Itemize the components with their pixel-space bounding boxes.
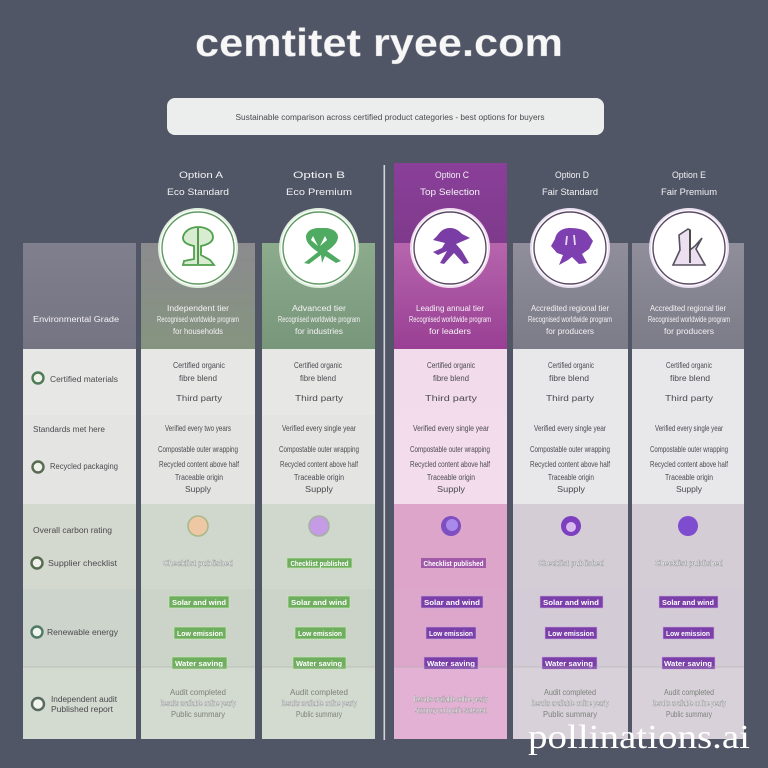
tags: Solar and wind <box>291 600 347 607</box>
row: standards: Compostable outer wrapping <box>530 445 610 454</box>
row: standards: Traceable origin <box>175 473 223 482</box>
panel: column 1 <box>141 170 255 739</box>
tags: Low emission <box>666 631 710 638</box>
rating dot <box>561 516 581 536</box>
row label: notes <box>32 695 118 714</box>
row: notes <box>531 688 609 719</box>
row label: standards <box>32 425 118 472</box>
description: Accredited regional tier <box>650 304 726 313</box>
row label: rating: Supplier checklist <box>48 559 118 568</box>
row: standards: Verified every single year <box>413 424 489 433</box>
row: standards: Supply <box>305 485 333 494</box>
row: notes: Summary and public statement <box>415 706 487 715</box>
heading <box>286 170 352 198</box>
row: notes: Results available online yearly <box>160 699 236 708</box>
description <box>157 304 239 336</box>
watermark: pollinations.ai <box>528 719 750 756</box>
row: standards: Compostable outer wrapping <box>158 445 238 454</box>
panel: column 4 <box>513 170 628 739</box>
description: Independent tier <box>167 304 229 313</box>
tags: Water saving <box>545 661 593 668</box>
description: Recognised worldwide program <box>648 315 730 324</box>
row: standards: Recycled content above half <box>410 460 491 469</box>
description: for producers <box>664 327 714 336</box>
tags: Low emission <box>177 631 223 638</box>
row: standards: Traceable origin <box>427 473 475 482</box>
label column header <box>23 243 136 349</box>
row: certification <box>425 361 477 403</box>
tags <box>659 596 718 669</box>
row: checklist: Checklist published <box>655 559 723 568</box>
heading <box>542 170 598 198</box>
tags <box>288 596 350 669</box>
divider line <box>384 165 385 740</box>
row: standards: Recycled content above half <box>650 460 729 469</box>
row: certification: Third party <box>665 394 713 403</box>
row: certification: Certified organic <box>294 361 342 370</box>
row: standards: Traceable origin <box>665 473 713 482</box>
row: notes <box>414 695 488 715</box>
row: standards: Compostable outer wrapping <box>279 445 359 454</box>
description: Recognised worldwide program <box>278 315 360 324</box>
row: notes: Public summary <box>543 710 597 719</box>
row: standards: Recycled content above half <box>280 460 359 469</box>
row: certification: fibre blend <box>549 374 589 383</box>
row: checklist: Checklist published <box>163 559 233 568</box>
tags: Low emission <box>298 631 342 638</box>
row: standards <box>410 424 491 494</box>
heading: Fair Premium <box>661 187 717 198</box>
row: checklist: Checklist published <box>538 559 604 568</box>
row: standards: Verified every single year <box>282 424 356 433</box>
description: Recognised worldwide program <box>409 315 491 324</box>
panel: column 5 <box>632 170 744 739</box>
tags: Solar and wind <box>172 600 226 607</box>
status tag: Checklist published <box>424 561 484 568</box>
row: certification <box>173 361 225 403</box>
row: notes: Results available online yearly <box>414 695 488 704</box>
row label: notes: Independent audit <box>51 695 118 704</box>
rating dot <box>309 516 329 536</box>
icon: green leaf knot <box>280 209 358 287</box>
row: standards: Supply <box>676 485 702 494</box>
row: notes: Public summary <box>171 710 225 719</box>
heading: Option D <box>555 170 589 181</box>
row: certification <box>294 361 343 403</box>
description: Recognised worldwide program <box>157 315 239 324</box>
rating dot <box>441 516 461 536</box>
row: standards: Traceable origin <box>548 473 594 482</box>
row label: certification: Certified materials <box>50 375 118 384</box>
icon: purple shell <box>531 209 609 287</box>
row: standards: Verified every single year <box>534 424 606 433</box>
tags <box>169 596 229 669</box>
row: notes: Results available online yearly <box>281 699 357 708</box>
heading: Fair Standard <box>542 187 598 198</box>
row: certification: fibre blend <box>433 374 469 383</box>
description <box>278 304 360 336</box>
title: cemtitet ryee.com <box>195 22 563 65</box>
row: notes: Audit completed <box>290 688 348 697</box>
description <box>648 304 730 336</box>
row: certification <box>665 361 713 403</box>
tags: Low emission <box>429 631 473 638</box>
row: notes: Public summary <box>296 710 342 719</box>
row: certification <box>546 361 594 403</box>
row: certification: Third party <box>176 394 222 403</box>
icon: purple figure <box>411 209 489 287</box>
description: for leaders <box>429 327 471 336</box>
subtitle banner: Sustainable comparison across certified product categories - best options for buyers <box>236 113 544 122</box>
row label: standards: Standards met here <box>33 425 106 434</box>
row label: rating: Overall carbon rating <box>33 526 112 535</box>
description <box>409 304 491 336</box>
description: for industries <box>295 327 343 336</box>
row: certification: Third party <box>546 394 594 403</box>
row: standards: Supply <box>437 485 465 494</box>
tags: Water saving <box>664 661 712 668</box>
row: notes: Audit completed <box>170 688 226 697</box>
status tag <box>421 558 486 568</box>
row label: rating <box>32 526 118 568</box>
row label: programs: Renewable energy <box>47 628 118 637</box>
row: standards <box>650 424 729 494</box>
panel: column 2 <box>262 170 375 739</box>
row: standards: Verified every single year <box>655 424 723 433</box>
row: standards: Recycled content above half <box>530 460 611 469</box>
row: certification: Third party <box>295 394 343 403</box>
row: notes <box>652 688 726 719</box>
status tag: Checklist published <box>290 561 348 568</box>
panel: label column <box>23 243 136 739</box>
row: standards: Supply <box>557 485 585 494</box>
row: standards <box>530 424 611 494</box>
description: Leading annual tier <box>416 304 484 313</box>
description: Recognised worldwide program <box>528 315 612 324</box>
row: standards <box>279 424 359 494</box>
tags: Water saving <box>296 661 342 668</box>
heading <box>420 170 480 198</box>
row: certification: fibre blend <box>179 374 217 383</box>
label column header: Environmental Grade <box>33 315 120 324</box>
row: standards: Supply <box>185 485 211 494</box>
rating dot <box>188 516 208 536</box>
heading <box>167 170 229 198</box>
row label: standards: Recycled packaging <box>50 462 118 471</box>
heading: Option C <box>435 170 469 181</box>
heading: Eco Premium <box>286 187 352 198</box>
row: notes: Results available online yearly <box>652 699 726 708</box>
row: notes: Audit completed <box>544 688 596 697</box>
description: Accredited regional tier <box>531 304 609 313</box>
heading <box>661 170 717 198</box>
description: for households <box>173 327 223 336</box>
heading: Option B <box>293 170 345 181</box>
row: notes: Public summary <box>666 710 712 719</box>
tags <box>421 596 483 669</box>
subtitle banner <box>167 98 604 135</box>
heading: Top Selection <box>420 187 480 198</box>
row: standards: Compostable outer wrapping <box>410 445 490 454</box>
row: certification: Certified organic <box>427 361 475 370</box>
row: standards: Traceable origin <box>294 473 344 482</box>
row: notes <box>281 688 357 719</box>
row: certification: Certified organic <box>666 361 712 370</box>
row: standards <box>158 424 240 494</box>
description <box>528 304 612 336</box>
panel: highlighted column 3 <box>394 163 507 739</box>
row: certification: Certified organic <box>548 361 594 370</box>
heading: Eco Standard <box>167 187 229 198</box>
row label: programs <box>32 626 118 638</box>
tags <box>540 596 603 669</box>
tags: Water saving <box>427 661 475 668</box>
heading: Option A <box>179 170 224 181</box>
tags: Solar and wind <box>424 600 480 607</box>
tags: Solar and wind <box>662 600 714 607</box>
row: standards: Verified every two years <box>165 424 231 433</box>
row: notes <box>160 688 236 719</box>
status tag <box>287 558 352 568</box>
row: notes: Audit completed <box>664 688 714 697</box>
tags: Water saving <box>175 661 223 668</box>
description: Advanced tier <box>292 304 346 313</box>
row: certification: fibre blend <box>300 374 336 383</box>
row label: certification <box>32 372 118 384</box>
icon: green tree <box>159 209 237 287</box>
heading: Option E <box>672 170 706 181</box>
row label: notes: Published report <box>51 705 114 714</box>
description: for producers <box>546 327 594 336</box>
tags: Solar and wind <box>543 600 599 607</box>
row divider lines <box>23 666 744 668</box>
row: certification: Third party <box>425 394 477 403</box>
tags: Low emission <box>548 631 594 638</box>
icon: pale steeple <box>650 209 728 287</box>
row: standards: Recycled content above half <box>159 460 240 469</box>
rating dot <box>678 516 698 536</box>
row: notes: Results available online yearly <box>531 699 609 708</box>
row: certification: Certified organic <box>173 361 225 370</box>
row: standards: Compostable outer wrapping <box>650 445 728 454</box>
row: certification: fibre blend <box>670 374 710 383</box>
